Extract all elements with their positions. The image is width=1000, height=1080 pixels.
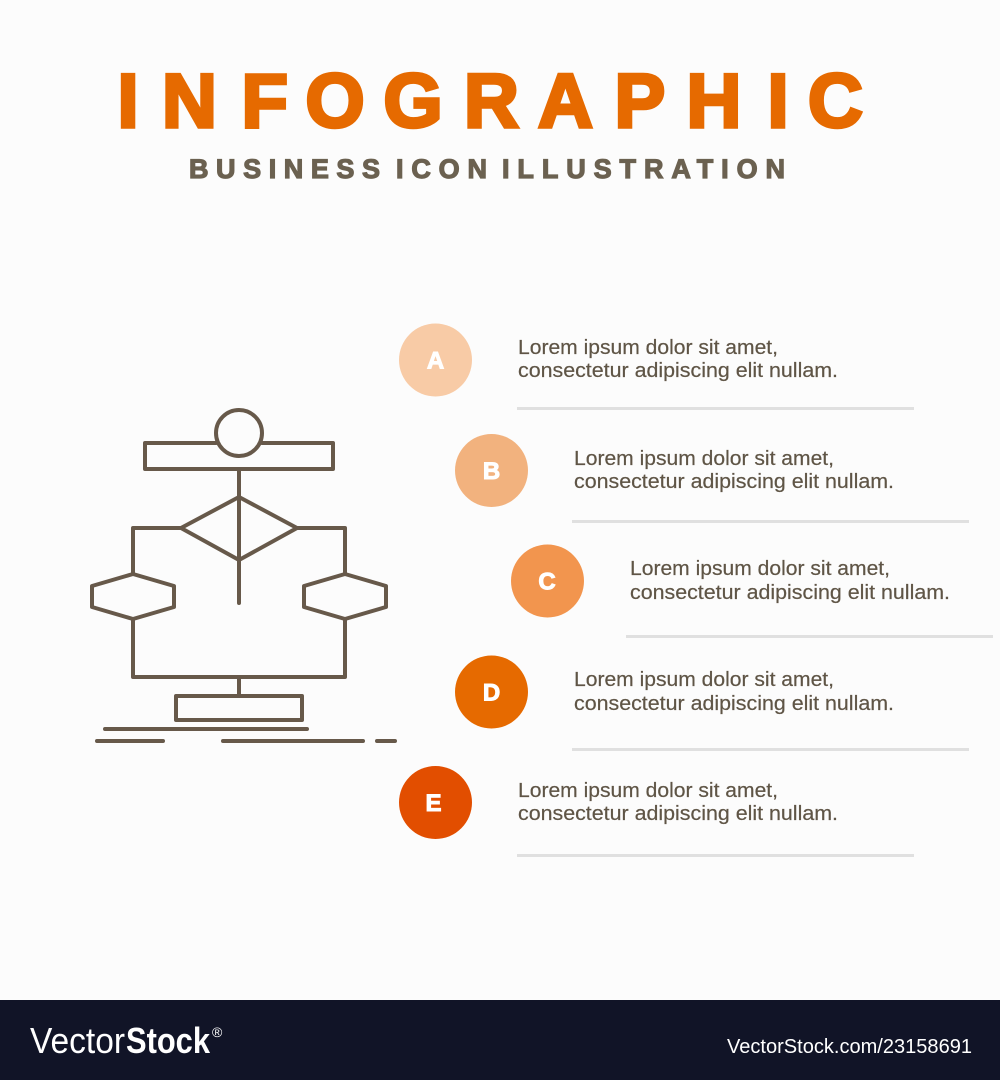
subtitle: ILLUSTRATION: [502, 154, 785, 184]
bottom rectangle: [176, 696, 302, 720]
text B: consectetur adipiscing elit nullam.: [574, 471, 894, 493]
icon: algorithm flowchart: [92, 410, 395, 741]
text A: Lorem ipsum dolor sit amet,: [518, 337, 778, 359]
text C: Lorem ipsum dolor sit amet,: [630, 558, 890, 580]
footer logo: ®: [212, 1024, 223, 1040]
item A: [399, 324, 914, 410]
badge D: D: [483, 680, 500, 706]
item E: [399, 766, 914, 857]
badge C: C: [538, 568, 556, 596]
right branch: [239, 528, 386, 696]
subtitle: BUSINESS: [189, 154, 380, 184]
badge B: [455, 434, 528, 507]
title: INFOGRAPHIC: [118, 59, 863, 144]
footer image id: VectorStock.com/23158691: [727, 1036, 972, 1058]
ground lines: [97, 729, 395, 741]
item B: [455, 434, 969, 523]
badge D: [455, 656, 528, 728]
subtitle: ICON: [396, 154, 487, 184]
badge E: E: [425, 790, 442, 817]
footer logo: Stock: [126, 1020, 211, 1061]
text C: consectetur adipiscing elit nullam.: [630, 582, 950, 604]
left branch: [92, 528, 239, 677]
badge E: [399, 766, 472, 839]
top rectangle with circle: [145, 443, 333, 469]
item D: [455, 656, 969, 751]
text E: Lorem ipsum dolor sit amet,: [518, 780, 778, 802]
badge C: [511, 544, 584, 618]
decision diamond with stem: [181, 469, 297, 603]
footer bar: [0, 1000, 1000, 1080]
badge B: B: [483, 458, 500, 485]
badge A: [399, 324, 472, 396]
footer logo: Vector: [30, 1020, 125, 1061]
text D: Lorem ipsum dolor sit amet,: [574, 669, 834, 691]
text A: consectetur adipiscing elit nullam.: [518, 360, 838, 382]
text E: consectetur adipiscing elit nullam.: [518, 803, 838, 825]
badge A: A: [427, 348, 444, 374]
text B: Lorem ipsum dolor sit amet,: [574, 448, 834, 470]
text D: consectetur adipiscing elit nullam.: [574, 693, 894, 715]
item C: [511, 544, 993, 638]
